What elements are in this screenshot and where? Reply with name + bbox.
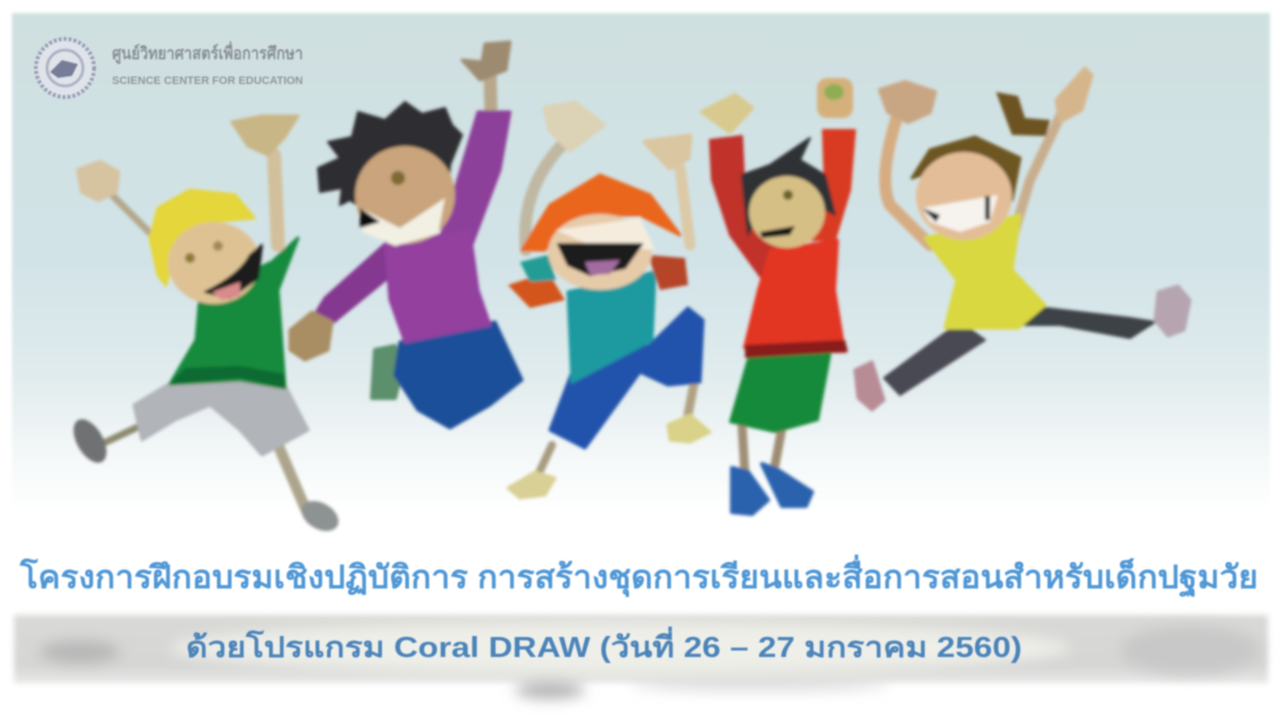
background panel [12, 13, 1270, 513]
kid 2: dark hair in purple [290, 42, 522, 428]
logo [36, 39, 303, 97]
grey cloud band [14, 615, 1268, 699]
kid 1: blond boy in green [67, 116, 344, 537]
kid 3: red hair girl in teal [508, 103, 710, 498]
logo text [112, 41, 303, 87]
logo text: SCIENCE CENTER FOR EDUCATION [112, 75, 303, 87]
children illustration [67, 42, 1190, 537]
logo text: ศูนย์วิทยาศาสตร์เพื่อการศึกษา [112, 41, 303, 65]
title line 2: ด้วยโปรแกรม Coral DRAW (วันที่ 26 – 27 มกราคม 2560) [186, 626, 1022, 664]
title line 1: โครงการฝึกอบรมเชิงปฏิบัติการ การสร้างชุดการเรียนและสื่อการสอนสำหรับเด็กปฐมวัย [19, 554, 1258, 598]
kid 5: girl in yellow [855, 68, 1190, 410]
logo emblem [36, 39, 94, 97]
kid 4: boy in red [702, 78, 855, 514]
